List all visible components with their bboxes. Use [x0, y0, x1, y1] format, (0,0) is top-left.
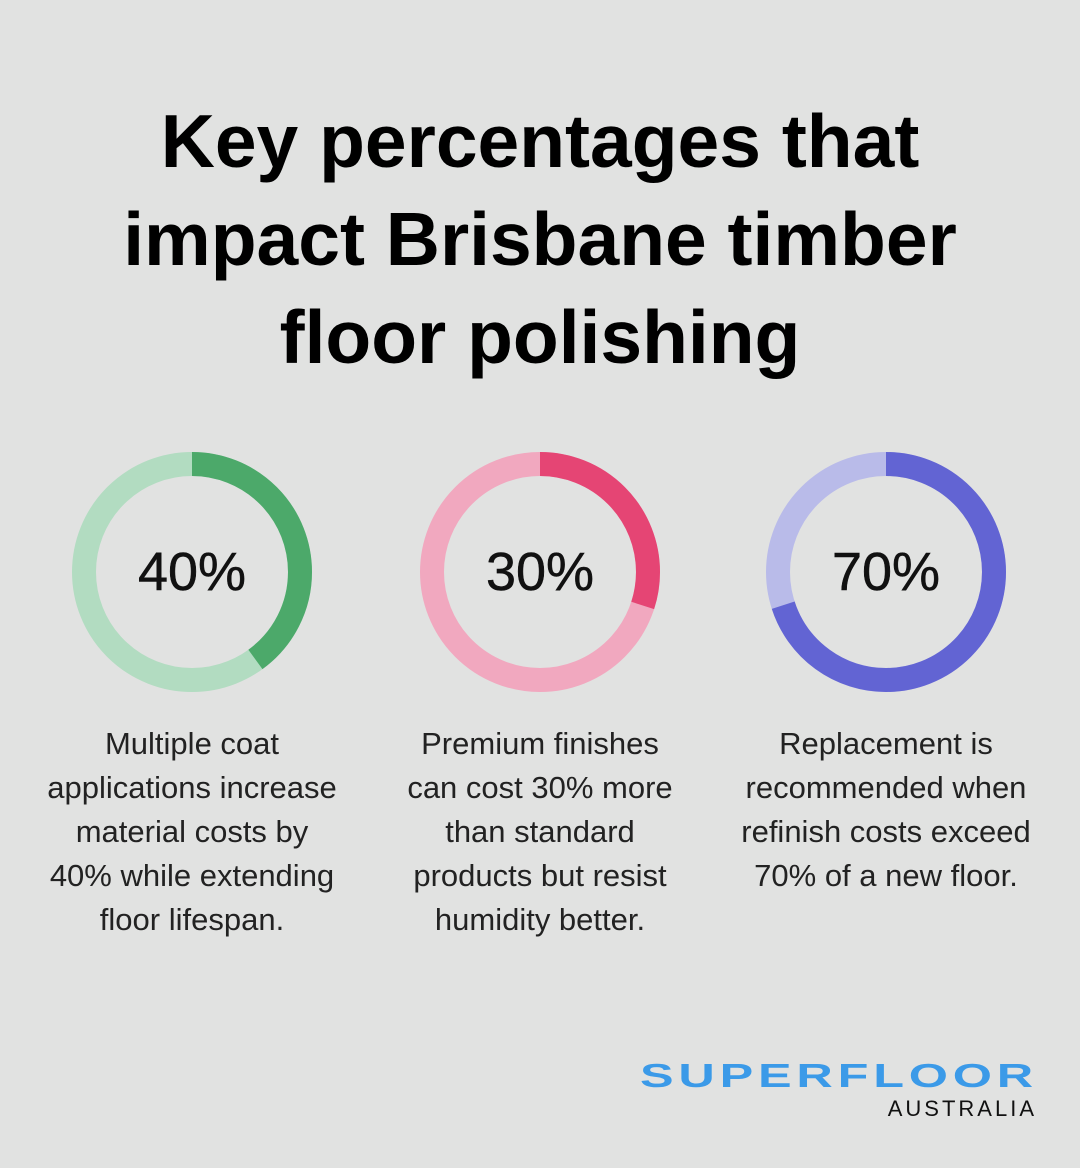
text: 70% description: 70% of a new floor.	[754, 858, 1018, 893]
donut: 40%: 40%	[138, 542, 246, 602]
text: 30% description	[407, 726, 673, 937]
donut: 30%: 30%	[486, 542, 594, 602]
text: 30% description: products but resist	[413, 858, 667, 893]
donut: 70%	[766, 452, 1006, 692]
title: impact Brisbane timber	[123, 197, 957, 281]
donut: 30%	[420, 452, 660, 692]
donut: 40%	[72, 452, 312, 692]
text: 70% description: recommended when	[746, 770, 1026, 805]
text: 40% description	[47, 726, 337, 937]
text: 40% description: 40% while extending	[50, 858, 334, 893]
logo: SUPERFLOOR	[640, 1057, 1038, 1094]
text: 30% description: than standard	[445, 814, 635, 849]
text: 30% description: can cost 30% more	[407, 770, 673, 805]
text: 40% description: floor lifespan.	[100, 902, 284, 937]
text: 40% description: material costs by	[76, 814, 308, 849]
text: 70% description: refinish costs exceed	[741, 814, 1031, 849]
logo	[640, 1057, 1038, 1121]
text: 40% description: applications increase	[47, 770, 337, 805]
donut: 70%: 70%	[832, 542, 940, 602]
text: 30% description: humidity better.	[435, 902, 645, 937]
title	[123, 99, 957, 379]
text: 40% description: Multiple coat	[105, 726, 279, 761]
logo: AUSTRALIA	[888, 1096, 1037, 1121]
text: 70% description	[741, 726, 1031, 893]
title: floor polishing	[280, 295, 800, 379]
title: Key percentages that	[161, 99, 919, 183]
text: 30% description: Premium finishes	[421, 726, 659, 761]
text: 70% description: Replacement is	[779, 726, 993, 761]
